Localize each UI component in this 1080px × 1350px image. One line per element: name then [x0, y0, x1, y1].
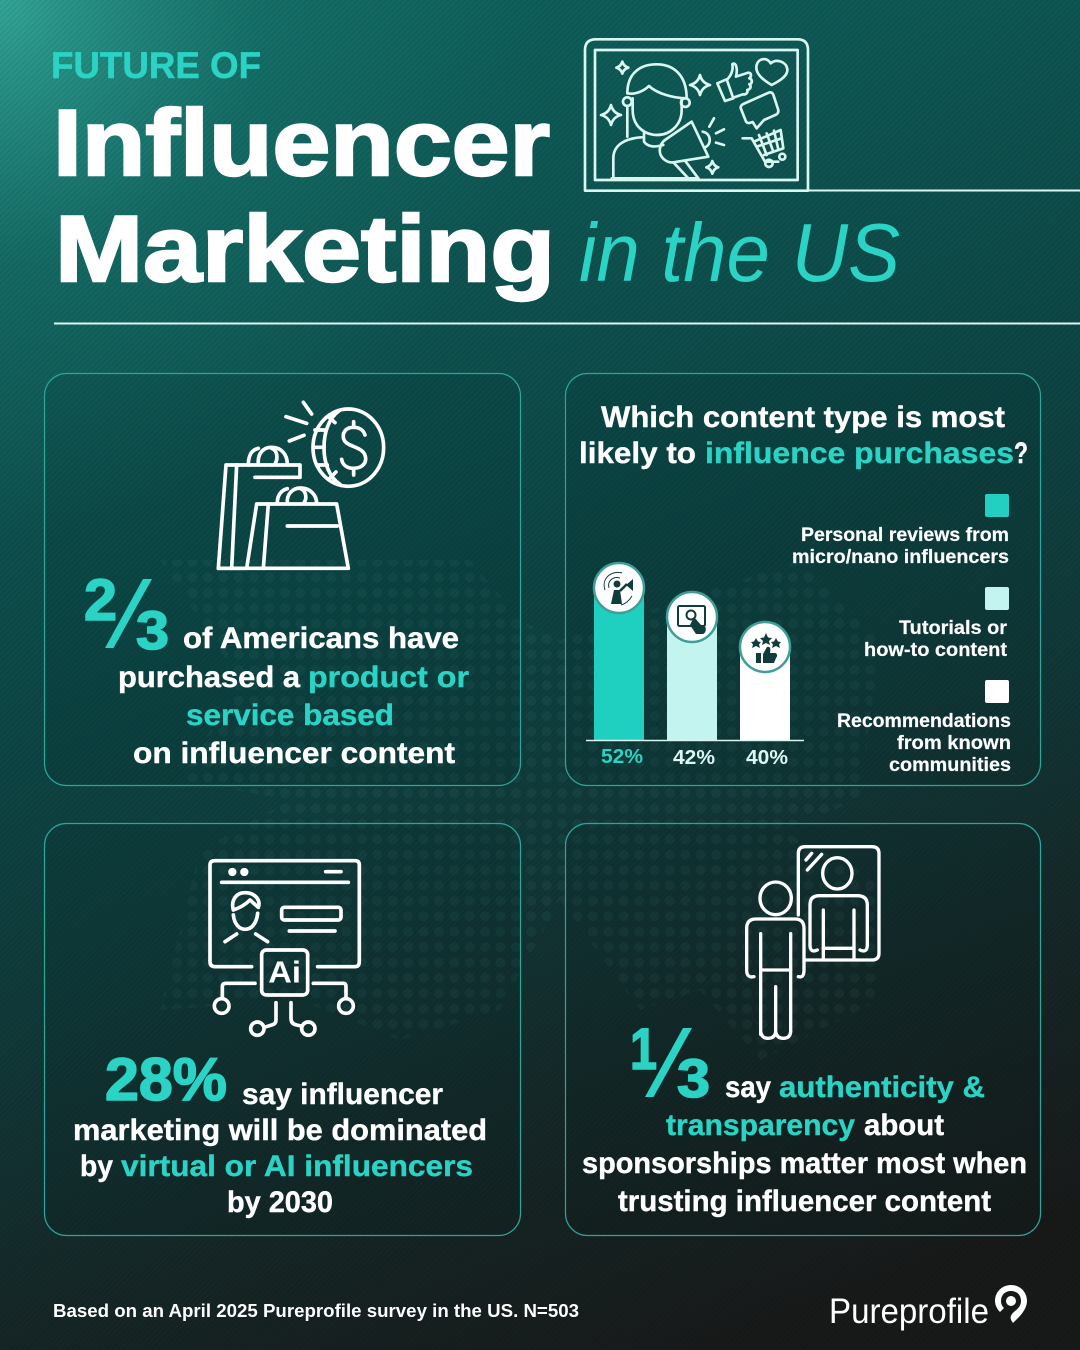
text: authenticity: trusting influencer content: [618, 1185, 991, 1218]
panel: two thirds purchased: [44, 374, 520, 786]
icon: shopping bags and coin: [218, 402, 384, 568]
chart heading: likely to: [579, 437, 696, 470]
text: authenticity: authenticity &: [779, 1071, 985, 1104]
headline: marketing: Marketing: [55, 196, 555, 301]
legend: communities: [889, 754, 1011, 776]
text: authenticity: [582, 1071, 1027, 1218]
chart heading: ?: [1014, 437, 1028, 470]
text: authenticity: sponsorships matter most when: [582, 1147, 1027, 1180]
legend: Personal reviews from: [801, 524, 1009, 546]
panel: AI influencers: [44, 824, 520, 1236]
text: AI influencers: [73, 1078, 487, 1219]
text: two thirds of Americans: [118, 622, 469, 770]
text: two thirds of Americans: on influencer content: [133, 737, 455, 770]
stat: two thirds: [84, 568, 169, 661]
chart heading: Which content type is most: [601, 401, 1005, 434]
stat: one third: [630, 1017, 710, 1109]
icon: influencer with megaphone on screen: [585, 39, 808, 191]
legend: Tutorials or: [899, 617, 1007, 639]
icon: location pin: [995, 1285, 1027, 1323]
text: authenticity: say: [725, 1071, 771, 1104]
legend: micro/nano influencers: [792, 546, 1009, 568]
value labels: 52%: [601, 746, 643, 768]
header rule under title: [54, 322, 1080, 324]
chart heading: influence purchases: [705, 437, 1014, 470]
footnote: Based on an April 2025 Pureprofile survey in the US. N=503: [53, 1300, 579, 1321]
icon: browser with AI chip: [210, 861, 359, 1035]
stat: one third: 1: [630, 1017, 657, 1082]
bar chart: 42%: [673, 747, 715, 769]
text: two thirds of Americans: purchased a: [118, 661, 300, 694]
stat: 28%: 28%: [105, 1046, 227, 1113]
bar chart: 40%: [746, 747, 788, 769]
bar: 42%: [667, 592, 717, 740]
text: two thirds of Americans: of Americans have: [183, 622, 459, 655]
text: AI influencers: marketing will be dominated: [73, 1114, 487, 1147]
panel: content type chart: [566, 374, 1040, 786]
stat: two thirds: 3: [136, 601, 169, 661]
bar chart: [586, 563, 804, 769]
header rule right of icon: [808, 190, 1080, 192]
legend: from known: [897, 732, 1011, 754]
text: AI influencers: virtual or AI influencers: [121, 1150, 473, 1183]
text: AI influencers: by 2030: [227, 1186, 333, 1219]
bar: 52%: [594, 563, 644, 740]
icon: browser with AI chip: Ai: [268, 955, 301, 989]
headline: in the US: in the US: [579, 206, 900, 299]
icon: person at mirror: [747, 847, 879, 1038]
eyebrow: future of: FUTURE OF: [51, 45, 261, 86]
legend: [792, 494, 1011, 776]
text: authenticity: transparency: [666, 1109, 855, 1142]
chart heading: [579, 401, 1028, 470]
bar: 40%: [740, 622, 790, 740]
stat: one third: 3: [677, 1049, 710, 1109]
logo: Pureprofile: Pureprofile: [829, 1292, 989, 1331]
headline: influencer: Influencer: [53, 90, 550, 195]
panel: authenticity: [566, 824, 1040, 1236]
stat: two thirds: 2: [84, 568, 117, 633]
legend: Recommendations: [837, 710, 1011, 732]
text: two thirds of Americans: service based: [186, 699, 394, 732]
title block: [51, 45, 900, 301]
text: two thirds of Americans: product or: [308, 661, 469, 694]
text: AI influencers: by: [80, 1150, 113, 1183]
text: authenticity: about: [864, 1109, 944, 1142]
text: AI influencers: say influencer: [242, 1078, 443, 1111]
legend: how-to content: [864, 639, 1008, 661]
